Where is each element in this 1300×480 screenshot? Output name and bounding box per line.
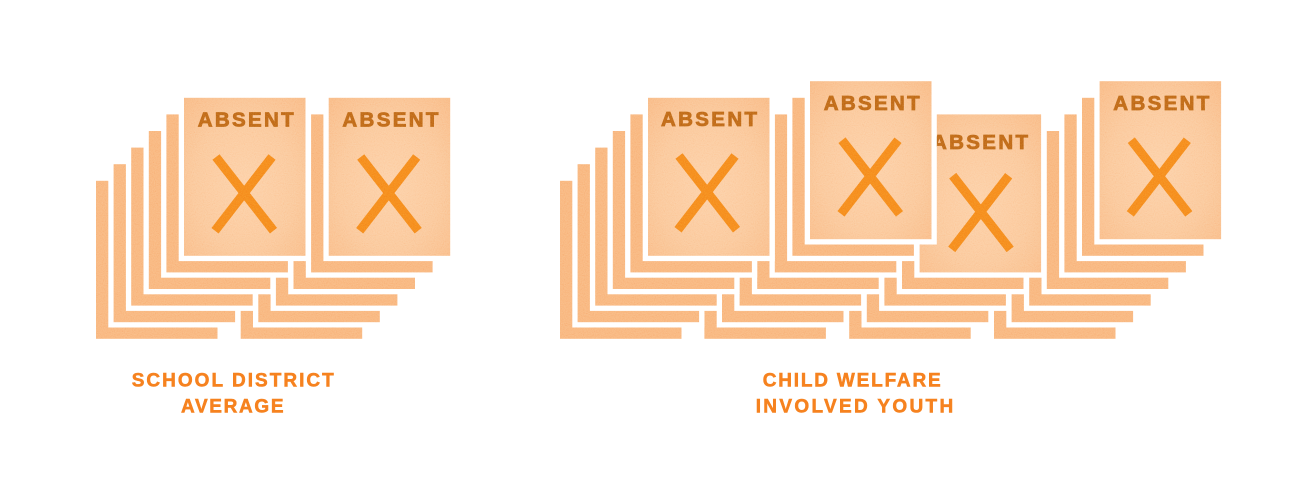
label: child welfare involved youth: INVOLVED YOUTH bbox=[756, 397, 953, 418]
paper stack: third stack with absent sheet bbox=[849, 114, 1041, 339]
paper stack: third stack with absent sheet: ABSENT bbox=[932, 131, 1028, 154]
label: school district average: AVERAGE bbox=[181, 397, 284, 418]
panel: child welfare involved youth bbox=[560, 81, 1221, 339]
paper stack: fourth stack with absent sheet: ABSENT bbox=[1113, 92, 1210, 115]
label: school district average: SCHOOL DISTRICT bbox=[132, 371, 334, 392]
paper stack: fourth stack with absent sheet bbox=[994, 81, 1221, 339]
paper stack: first stack with absent sheet bbox=[560, 98, 770, 339]
paper stack: second stack with one absent sheet: ABSENT bbox=[342, 109, 439, 132]
paper stack: first stack with one absent sheet bbox=[96, 98, 306, 339]
paper stack: first stack with one absent sheet: ABSENT bbox=[198, 109, 294, 132]
paper stack: first stack with absent sheet: ABSENT bbox=[661, 108, 757, 131]
paper stack: second stack with absent sheet: ABSENT bbox=[824, 92, 920, 115]
paper stack: second stack with one absent sheet bbox=[241, 98, 450, 339]
paper stack: second stack with absent sheet bbox=[704, 81, 932, 339]
panel: school district average bbox=[96, 98, 450, 339]
label: child welfare involved youth: CHILD WELFARE bbox=[763, 371, 941, 392]
